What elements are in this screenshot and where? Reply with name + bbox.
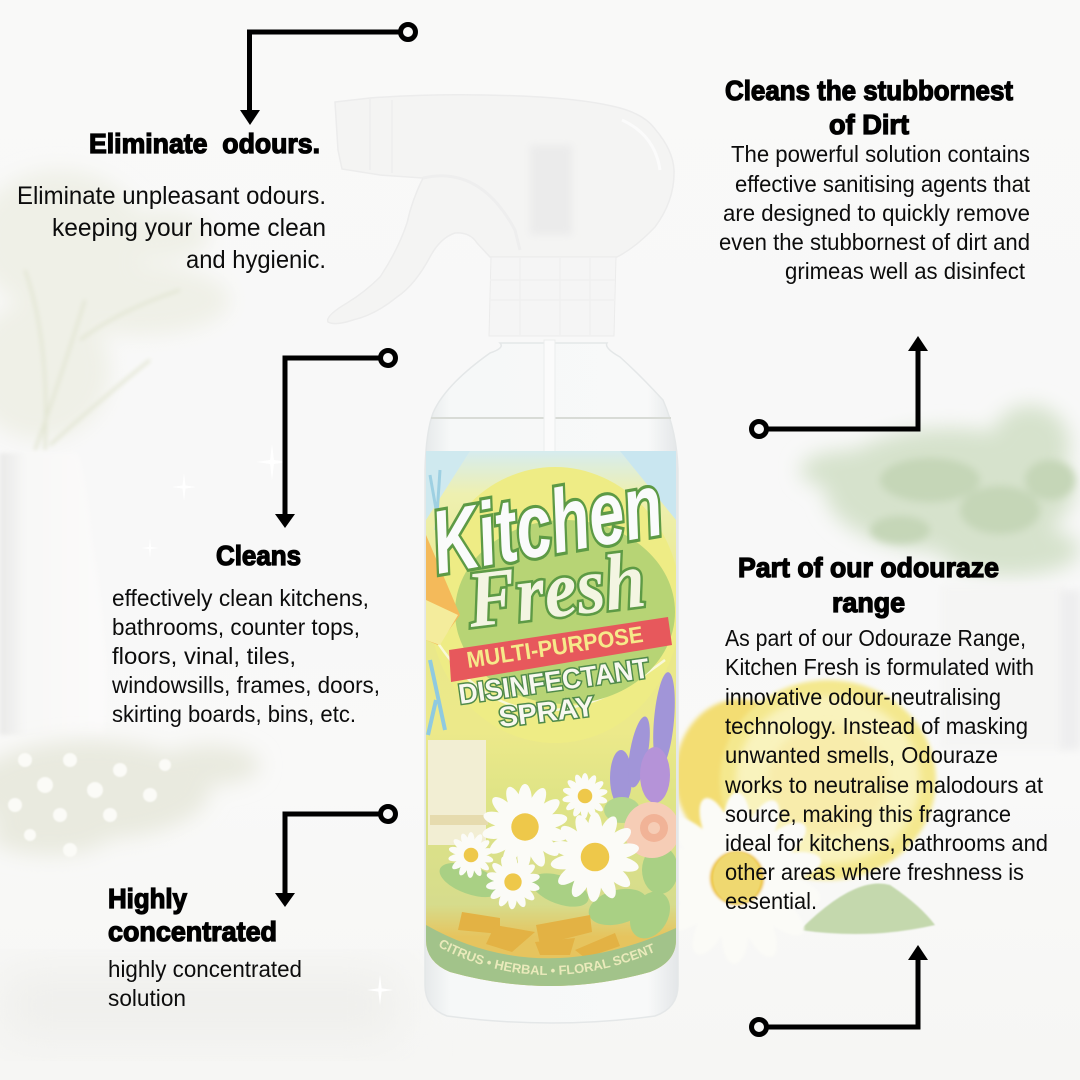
- heading: Cleans the stubbornest: [725, 75, 1013, 106]
- body text: highly concentrated: [108, 956, 302, 982]
- arrow: odouraze range: [752, 945, 928, 1034]
- liquid line: [431, 417, 671, 419]
- callout top right: Cleans the stubbornest of Dirt: [719, 75, 1030, 436]
- orange slice: [426, 535, 460, 645]
- body text: works to neutralise malodours at: [724, 772, 1043, 798]
- brand text: Kitchen: Kitchen: [424, 455, 670, 594]
- background: baby's breath flowers: [0, 740, 260, 857]
- callout top left: Eliminate odours: [17, 24, 416, 274]
- body text: windowsills, frames, doors,: [111, 672, 380, 698]
- background: left plant sprigs: [0, 170, 230, 450]
- body text: other areas where freshness is: [725, 859, 1024, 885]
- body text: keeping your home clean: [52, 214, 326, 242]
- body text: innovative odour-neutralising: [725, 684, 1001, 710]
- bottle glass body: [425, 343, 678, 1023]
- disinfectant text: DISINFECTANT: [457, 653, 651, 710]
- kitchen scene on label: [428, 740, 486, 845]
- screw cap: [489, 257, 616, 336]
- body text: skirting boards, bins, etc.: [112, 701, 356, 727]
- arrow: stubborn dirt: [752, 336, 928, 436]
- heading: Cleans: [216, 540, 301, 571]
- heading: range: [832, 587, 905, 618]
- body text: [17, 182, 326, 274]
- body text: even the stubbornest of dirt and: [719, 229, 1030, 255]
- body text: bathrooms, counter tops,: [112, 614, 360, 640]
- heading: of Dirt: [829, 109, 909, 140]
- background: leaf and daisy: [650, 792, 935, 964]
- band text: CITRUS • HERBAL • FLORAL SCENT: [440, 940, 653, 975]
- bottom green band: [426, 925, 676, 986]
- body text: technology. Instead of masking: [725, 713, 1028, 739]
- body text: are designed to quickly remove: [723, 200, 1030, 226]
- spray bottle: [327, 94, 679, 1024]
- heading: [108, 883, 277, 947]
- arrow: cleans: [275, 350, 396, 528]
- body text: Kitchen Fresh is formulated with: [725, 654, 1034, 680]
- body text: essential.: [725, 888, 817, 914]
- background: sparkles: [142, 444, 393, 1005]
- brand text: Fresh: Fresh: [461, 535, 650, 644]
- callout bottom right: Part of our odouraze range: [724, 552, 1048, 1034]
- red ribbon: [449, 617, 672, 682]
- heading: Eliminate odours.: [89, 128, 320, 159]
- trigger head: [328, 95, 674, 324]
- background: lemons: [675, 680, 936, 880]
- background: green plant right: [800, 405, 1080, 576]
- callout bottom left: Highly concentrated: [108, 806, 396, 1011]
- blue splash: [428, 660, 445, 735]
- body text: As part of our Odouraze Range,: [725, 625, 1026, 651]
- body text: [111, 585, 380, 727]
- body text: ideal for kitchens, bathrooms and: [725, 830, 1048, 856]
- body text: and hygienic.: [186, 246, 326, 274]
- heading: Highly: [108, 883, 187, 914]
- body text: effective sanitising agents that: [735, 171, 1030, 197]
- heading: [725, 75, 1013, 140]
- rose: [624, 802, 680, 858]
- body text: [724, 625, 1048, 914]
- wood chips: [458, 912, 620, 958]
- background: soft white pot right: [940, 585, 1080, 750]
- body text: floors, vinal, tiles,: [112, 643, 296, 669]
- background: white vase: [0, 453, 106, 735]
- lavender: [610, 671, 678, 806]
- arrow: highly concentrated: [275, 806, 396, 907]
- body text: [108, 956, 302, 1011]
- product label: [426, 451, 676, 986]
- body text: solution: [108, 985, 186, 1011]
- body text: The powerful solution contains: [731, 141, 1030, 167]
- daisies: [481, 784, 569, 870]
- dip tube: [544, 340, 555, 455]
- body text: [719, 141, 1030, 284]
- arrow: eliminate odours: [240, 24, 416, 125]
- body text: grimeas well as disinfect: [785, 258, 1025, 284]
- heading: Part of our odouraze: [738, 552, 999, 583]
- body text: source, making this fragrance: [725, 801, 1011, 827]
- leaves and herbs: [435, 797, 678, 946]
- body text: unwanted smells, Odouraze: [725, 742, 998, 768]
- body text: effectively clean kitchens,: [112, 585, 369, 611]
- spray text: SPRAY: [497, 690, 596, 733]
- callout middle left: Cleans: [111, 350, 396, 727]
- heading: [738, 552, 999, 618]
- heading: concentrated: [108, 916, 277, 947]
- multi-purpose text: MULTI-PURPOSE: [465, 621, 645, 673]
- body text: Eliminate unpleasant odours.: [17, 182, 326, 210]
